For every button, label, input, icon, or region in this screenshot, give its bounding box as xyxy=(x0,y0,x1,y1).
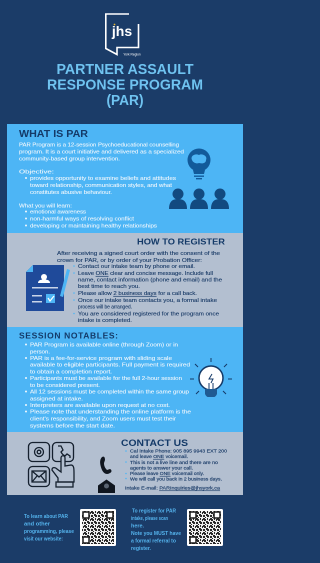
what is PAR body text: PAR Program is a 12-session Psychoeducational counselling xyxy=(19,142,179,148)
session notables body text: assigned at intake. xyxy=(30,396,83,402)
right QR note: register. xyxy=(131,546,151,552)
contact details text: This is not a live line and there are no xyxy=(130,460,218,465)
QR code: intake xyxy=(187,509,223,546)
heading: what is PAR: WHAT IS PAR xyxy=(19,129,89,140)
what is PAR body text: program. It is a court initiative and delivered as a specialized xyxy=(19,150,184,156)
what is PAR body text: constitutes abusive behaviour. xyxy=(30,190,112,196)
right QR note: intake, please scan xyxy=(131,516,168,522)
session notables body text xyxy=(25,342,191,430)
contact details text: Cal Intake Phone: 905 895 9943 EXT 200 xyxy=(130,448,227,454)
how to register body text: Contact our intake team by phone or email. xyxy=(78,264,195,270)
how to register body text: Once our intake team contacts you, a formal intake xyxy=(78,298,217,304)
contact details text xyxy=(125,448,227,490)
logo: jhs York Region xyxy=(106,14,141,56)
icon: envelope xyxy=(98,480,115,493)
QR code: website xyxy=(80,509,116,546)
left QR note: visit our website: xyxy=(24,536,63,542)
how to register body text: intake is completed. xyxy=(78,318,132,324)
what is PAR body text xyxy=(19,142,184,230)
icon: brain lightbulb xyxy=(188,148,210,179)
what is PAR body text: community-based group intervention. xyxy=(19,156,120,162)
icon: three people xyxy=(169,188,229,209)
title: PARTNER ASSAULT xyxy=(56,62,194,78)
panel: how to register xyxy=(7,233,243,327)
title: (PAR) xyxy=(106,93,144,109)
right QR note: To register for PAR xyxy=(132,508,176,514)
how to register body text xyxy=(57,251,222,324)
heading: how to register: HOW TO REGISTER xyxy=(137,236,225,246)
what is PAR body text: emotional awareness xyxy=(30,210,86,216)
how to register body text: best time to reach you. xyxy=(78,284,140,290)
session notables body text: person. xyxy=(30,350,50,356)
heading: session notables: SESSION NOTABLES: xyxy=(19,330,118,340)
what is PAR body text: Objective: xyxy=(19,170,55,176)
how to register body text: Leave ONE clear and concise message. Include full xyxy=(78,271,213,277)
session notables body text: Please note that understanding the online platform is the xyxy=(30,410,191,416)
right QR note: Note you MUST have xyxy=(131,531,181,537)
left QR note: programming, please xyxy=(24,529,74,535)
background xyxy=(0,0,250,563)
left QR note: To learn about PAR xyxy=(24,514,68,520)
right QR note xyxy=(131,508,181,552)
session notables body text: client's responsibility, and Zoom users must test their xyxy=(30,416,176,422)
panel: what is PAR xyxy=(7,124,243,233)
contact details text: Intake E-mail: PARInquiries@jhsyork.ca xyxy=(125,486,220,490)
what is PAR body text: What you will learn: xyxy=(19,204,72,210)
how to register body text: process will be arranged. xyxy=(78,304,132,310)
panel: contact us xyxy=(7,432,243,495)
title xyxy=(47,62,203,109)
how to register body text: Please allow 2 business days for a call back. xyxy=(78,291,197,297)
left QR note xyxy=(24,514,74,542)
title: RESPONSE PROGRAM xyxy=(47,78,203,94)
how to register body text: crown for PAR, or by order of your Probation Officer: xyxy=(57,258,202,264)
logo: jhs York Region: York Region xyxy=(123,52,141,56)
session notables body text: Participants must be available for the full 2-hour session xyxy=(30,376,182,382)
session notables body text: PAR Program is available online (through Zoom) or in xyxy=(30,342,178,348)
what is PAR body text: provides opportunity to examine beliefs and attitudes xyxy=(30,176,176,182)
right QR note: a formal referral to xyxy=(131,538,177,544)
session notables body text: to be considered present. xyxy=(30,383,100,389)
what is PAR body text: developing or maintaining healthy relationships xyxy=(30,224,157,230)
session notables body text: All 12 sessions must be completed within the same group xyxy=(30,390,189,396)
icon: contact touch grid xyxy=(28,442,74,487)
heading: contact us: CONTACT US xyxy=(121,438,188,448)
session notables body text: PAR is a fee-for-service program with sliding scale xyxy=(30,356,172,362)
session notables body text: to obtain a completion report. xyxy=(30,370,113,376)
panel: session notables xyxy=(7,327,243,432)
what is PAR body text: non-harmful ways of resolving conflict xyxy=(30,216,134,222)
how to register body text: After receiving a signed court order with the consent of the xyxy=(57,251,220,257)
icon: idea lightbulb xyxy=(190,358,232,397)
icon: registration form and pencil xyxy=(26,265,70,311)
session notables body text: systems before the start date. xyxy=(30,424,116,430)
logo: jhs York Region: jhs xyxy=(111,23,132,39)
session notables body text: available to eligible participants. Full payment is required xyxy=(30,362,190,368)
contact details text: agents to answer your call. xyxy=(130,466,193,470)
what is PAR body text: toward relationship, communication styles, and what xyxy=(30,183,172,189)
session notables body text: Interpreters are available upon request at no cost. xyxy=(30,403,170,409)
icon: phone xyxy=(100,457,112,474)
contact details text: and leave ONE voicemail. xyxy=(130,454,188,459)
left QR note: and other xyxy=(24,522,50,528)
contact details text: Please leave ONE voicemail only. xyxy=(130,471,204,476)
right QR note: here. xyxy=(131,524,145,530)
contact details text: We will call you back in 2 business days. xyxy=(130,476,222,482)
how to register body text: name, contact information (phone and email) and the xyxy=(78,278,222,284)
how to register body text: You are considered registered for the program once xyxy=(78,312,219,318)
